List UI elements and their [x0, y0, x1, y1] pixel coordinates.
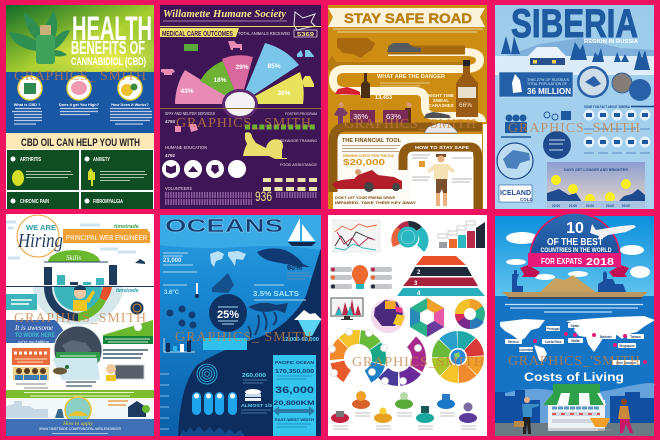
road — [333, 52, 482, 122]
stat: 90% — [287, 263, 311, 279]
diagram: ring — [459, 303, 480, 325]
callout: awesome to work here: TO WORK HERE — [15, 333, 55, 339]
chart: radial outcomes fan: 29% — [235, 64, 249, 71]
stat circle: 25%: 25% — [217, 309, 239, 321]
title: health benefits: CANNABIDIOL (CBD) — [71, 56, 146, 68]
stat: 13,453: 13,453 — [375, 95, 392, 101]
chart: days get longer — [547, 162, 645, 209]
stat: temperature: 3.6°C — [164, 290, 180, 296]
icons: fact circles — [584, 110, 650, 153]
chart: radial outcomes fan: 43% — [180, 88, 194, 95]
icon: small car — [424, 112, 451, 118]
world map with labels: Colombia — [519, 348, 533, 352]
stat: almost 1/3 — [241, 403, 273, 413]
section: humane education: 4792 — [165, 153, 176, 158]
world map with labels: Bahrain — [600, 335, 612, 339]
label: 12,000-60,000 — [282, 337, 319, 343]
callout: awesome to work here — [6, 320, 66, 344]
chart: days get longer: 23:00 — [606, 204, 614, 208]
stat boxes 36% and 63%: 36% — [353, 112, 368, 121]
lower white section with brown road — [333, 124, 487, 209]
world map with labels: Singapore — [619, 344, 635, 348]
intro paragraph — [505, 304, 643, 312]
heading: medical care outcomes: TOTAL ANIMALS RECEIVED — [238, 31, 291, 36]
ribbon: for expats 2018 — [520, 253, 629, 277]
panel: health benefits of CBD — [6, 5, 154, 209]
icon: red convertible — [332, 169, 402, 192]
chart: days get longer: 22:00 — [586, 204, 594, 208]
teal callout — [6, 294, 37, 310]
panel: Pacific Ocean stats: PACIFIC OCEAN — [275, 360, 314, 365]
chart: donut — [391, 221, 429, 252]
icon: large bottle 66%: 66% — [459, 102, 472, 109]
chart: days get longer: 20:00 — [552, 204, 560, 208]
closing message: IMPAIRED. TAKE THEIR KEY AWAY — [335, 200, 416, 205]
section: what is CBD columns — [6, 72, 154, 133]
icon: sailing boat — [288, 218, 316, 246]
footer: how to apply: How to apply — [62, 421, 93, 427]
panel: Pacific Ocean stats: 170,350,000 — [275, 369, 314, 375]
text: financial tool — [342, 138, 401, 167]
heading: fun facts: SOME FUN FACT ABOUT SIBERIA — [584, 105, 630, 109]
text: night time crashes — [428, 93, 454, 108]
people figures — [334, 102, 412, 130]
chart: line chart — [333, 220, 380, 252]
panel: stay safe road — [328, 5, 487, 209]
chart: days get longer: 00:00 — [622, 204, 630, 208]
icon: white car — [424, 123, 458, 133]
world map with labels: Spain — [571, 324, 579, 328]
conditions grid — [6, 149, 154, 209]
chart: concentric rings — [197, 364, 217, 384]
stat box: 36 million: 36 MILLION — [527, 87, 571, 96]
footer: how to apply — [6, 419, 154, 436]
ribbon: for expats 2018: 2018 — [586, 257, 615, 268]
heading: how to stay safe — [410, 145, 473, 207]
heading: CBD oil can help: CBD OIL CAN HELP YOU WITH — [21, 137, 140, 149]
section: spay and neuter: 4793 — [165, 119, 176, 124]
icons: animal silhouettes — [161, 41, 314, 132]
conditions grid: ARTHRITIS — [20, 157, 42, 163]
title ribbon — [328, 8, 485, 27]
banner: timetrade — [114, 224, 139, 230]
icon: oil bottle — [36, 25, 55, 64]
heading: medical care outcomes: 5369 — [297, 32, 314, 38]
stat boxes 36% and 63%: 63% — [386, 112, 401, 121]
heading: how to stay safe: HOW TO STAY SAFE — [415, 145, 469, 150]
section: foster program: FOSTER PROGRAM — [285, 111, 317, 116]
panel: Willamette Humane Society — [160, 5, 321, 209]
title arch: COUNTRIES IN THE WORLD — [540, 248, 612, 254]
text: depth stat: 21,000 — [163, 258, 182, 264]
store illustration — [543, 384, 606, 431]
text: financial tool: DRIVING COSTS FOR THE DUI — [343, 154, 394, 158]
chart: radial outcomes fan: 18% — [213, 77, 227, 84]
stat: almost 1/3: ALMOST 1/3 — [241, 403, 273, 408]
stat: 260,000: 260,000 — [242, 373, 266, 379]
section: humane education — [162, 145, 246, 178]
callout: awesome to work here: we're not kidding — [18, 339, 50, 344]
conditions grid: ANXIETY — [93, 157, 111, 163]
monitor and developer — [66, 350, 148, 386]
icon: pets outline — [294, 12, 315, 30]
callout: awesome to work here: It is awesome — [14, 324, 53, 332]
section: spay and neuter: SPAY AND NEUTER SERVICES — [165, 111, 215, 116]
depth ruler — [160, 374, 169, 429]
figure: woman with cart — [590, 399, 633, 433]
title: REGION IN RUSSIA — [584, 39, 638, 45]
chart: radial outcomes fan — [175, 43, 304, 119]
heading: dangers: WHAT ARE THE DANGER — [377, 74, 445, 80]
iceland badge: COLD — [520, 197, 533, 202]
conditions grid: FIBROMYALGIA — [93, 199, 123, 205]
heading: medical care outcomes: MEDICAL CARE OUTCOMES — [162, 29, 233, 38]
chart: pyramid: 4 — [417, 291, 421, 297]
stat: salts: 3.5% SALTS — [253, 291, 299, 298]
section: foster program — [245, 111, 317, 127]
circle stat — [543, 131, 571, 159]
heading: costs of living: Costs of Living — [524, 370, 624, 384]
icon: whale — [257, 248, 310, 267]
capsule list — [192, 392, 237, 415]
chart: days get longer: 21:00 — [569, 204, 577, 208]
decorative clouds — [6, 222, 136, 258]
diagram: segmented arc — [328, 328, 422, 384]
world map with labels: New Zealand — [616, 361, 636, 365]
watermark: GRAPHICS_SMITH — [352, 355, 484, 370]
panel: Pacific Ocean stats: 36,000 — [275, 385, 314, 395]
title: OCEANS — [165, 216, 283, 236]
seaweed — [248, 312, 276, 338]
clouds — [506, 232, 650, 280]
title ribbon: STAY SAFE ROAD — [344, 10, 472, 26]
footer: how to apply: WWW.TIMETRADE.COM/PRINCIPAL-WEB-ENGINEER — [39, 426, 121, 431]
icons: people and gears — [501, 111, 571, 137]
section: food assistance: FOOD ASSISTANCE — [280, 162, 317, 167]
cyan callout — [203, 338, 247, 350]
icon: wine bottle — [361, 73, 370, 98]
stat box: 36 million — [499, 72, 573, 97]
header: green leaf banner — [6, 5, 154, 72]
label: behavior training: BEHAVIOR TRAINING — [280, 138, 317, 143]
iceland badge — [499, 185, 533, 202]
3D discs row — [331, 391, 477, 429]
closing message — [335, 195, 416, 205]
section: volunteers: 936 — [255, 188, 272, 204]
icon: cabin — [526, 47, 568, 65]
section: volunteers — [165, 186, 317, 204]
seafloor — [180, 426, 245, 436]
title arch: 10 — [566, 220, 584, 237]
chart: pyramid — [397, 256, 485, 297]
title: Willamette Humane Society — [163, 8, 286, 20]
figure: man with basket — [514, 397, 539, 434]
conditions grid: CHRONIC PAIN — [20, 199, 49, 205]
panel: Pacific Ocean stats: EAST-WEST WIDTH — [275, 417, 314, 422]
panel: best countries for expats — [495, 213, 655, 436]
banner — [63, 224, 150, 243]
team photo — [13, 367, 49, 388]
dial with character — [33, 285, 144, 325]
chart: bars — [164, 338, 195, 352]
world map with labels: Mexico — [508, 340, 519, 344]
section: what is CBD columns: Does it get You High? — [59, 102, 100, 107]
icon: barrels — [245, 389, 261, 401]
green band — [6, 390, 154, 398]
island skyline — [502, 270, 648, 299]
text: night time crashes: NIGHT TIME — [428, 93, 454, 98]
icon: fish — [248, 303, 288, 313]
icon: light bulb with options — [330, 265, 392, 289]
world map with labels: Costa Rica — [545, 340, 561, 344]
diagram: purple blob — [371, 299, 405, 333]
iceland badge: ICELAND — [500, 190, 531, 197]
stat: temperature — [163, 283, 199, 298]
pond and duck — [52, 358, 100, 380]
chart: pyramid: 2 — [417, 270, 421, 276]
heading: CBD oil can help — [6, 133, 154, 149]
chart: pyramid: 3 — [414, 281, 418, 287]
banner: PRINCIPAL WEB ENGINEER — [66, 235, 147, 242]
watermark: GRAPHICS_ SMITH — [14, 69, 146, 84]
watermark: GRAPHICS_ SMITH — [176, 116, 311, 131]
globe — [54, 326, 102, 374]
icon: iceberg — [294, 310, 322, 336]
world map with labels — [500, 316, 655, 365]
section: what is CBD columns: What is CBD ? — [14, 102, 41, 107]
text: financial tool: $20,000 — [343, 158, 386, 167]
diagram: hexagon — [410, 298, 444, 337]
panel: Pacific Ocean stats — [273, 355, 316, 436]
chart: radial outcomes fan: 36% — [277, 90, 291, 97]
world map — [210, 251, 246, 267]
city backdrop — [495, 383, 655, 436]
title arch: OF THE BEST — [547, 237, 603, 248]
ribbon: for expats 2018: FOR EXPATS — [541, 257, 583, 266]
dial with character: timetrade — [116, 288, 139, 294]
map circle — [497, 143, 533, 179]
text: financial tool: THE FINANCIAL TOOL — [342, 138, 401, 144]
logo: we are hiring — [17, 215, 63, 257]
deep water shape — [178, 248, 321, 436]
chart: stepped bars — [438, 221, 485, 248]
heading: medical care outcomes — [160, 28, 317, 38]
icon: red car — [335, 87, 360, 95]
illustration: woman and dog — [243, 132, 287, 159]
world map with labels: Malta — [571, 339, 580, 343]
panel: Siberia — [495, 2, 654, 209]
stat boxes 36% and 63% — [350, 110, 408, 124]
title: health benefits: BENEFITS OF — [71, 38, 145, 58]
world map with labels: Taiwan — [630, 335, 641, 339]
logo: we are hiring: Hiring — [17, 230, 63, 252]
section: food assistance — [263, 162, 317, 189]
winter landscape — [495, 36, 654, 75]
stat circle: 25% — [209, 294, 247, 332]
stat: salts — [253, 285, 306, 300]
stat: 90%: 90% — [287, 263, 302, 272]
stat box: 36 million: THIS 27% OF RUSSIA'S — [527, 78, 570, 82]
callout: green perks — [103, 320, 153, 344]
stat box: 36 million: TOTAL POPULATION OF — [527, 82, 567, 86]
text: night time crashes: CARASHES — [428, 103, 454, 108]
icon: large bottle 66% — [456, 60, 478, 117]
badges — [577, 66, 651, 101]
icon: grey car — [387, 43, 421, 52]
calendar card — [12, 348, 50, 365]
skills heading and chart — [44, 250, 145, 285]
watermark: GRAPHICS_ SMITH — [175, 330, 312, 345]
diagram: globe wheel — [440, 340, 476, 374]
panel: oceans — [160, 215, 322, 436]
text: night time crashes: SWEAL — [433, 98, 449, 103]
world map with labels: Portugal — [547, 327, 560, 331]
icon: megaphone ship — [212, 273, 234, 293]
chart: radial outcomes fan: 85% — [267, 63, 281, 70]
section: spay and neuter — [165, 111, 215, 124]
title: health benefits — [71, 10, 152, 68]
section: what is CBD columns: How Does it Works? — [111, 102, 149, 107]
panel: Pacific Ocean stats: 20,800KM — [274, 401, 314, 407]
watermark: GRAPHICS_ SMITH — [344, 117, 476, 132]
watermark: GRAPHICS_SMITH — [14, 311, 146, 326]
section: humane education: HUMANE EDUCATION — [165, 145, 207, 150]
section: volunteers: VOLUNTEERS — [165, 186, 192, 191]
title arch — [530, 213, 620, 258]
icon: monitor chart — [331, 298, 363, 320]
logo: we are hiring: WE ARE — [26, 225, 56, 232]
closing message: DON'T LET YOUR FRIEND DRIVE — [335, 195, 395, 200]
icon: airplane — [590, 224, 636, 239]
watermark: GRAPHICS_'SMITH — [508, 354, 640, 369]
illustration: man in lederhosen — [419, 154, 455, 206]
panel: infographic elements — [328, 215, 487, 436]
text: depth stat — [163, 253, 197, 272]
footer scene — [6, 397, 154, 423]
hex diagram — [166, 306, 196, 328]
panel: we are hiring — [6, 214, 154, 436]
skills heading and chart: Skills — [66, 254, 81, 262]
map: usa — [337, 38, 375, 58]
watermark: GRAPHICS_SMITH — [508, 121, 640, 136]
chart: days get longer: DAYS GET LONGER AND BRIGHTER — [564, 168, 628, 172]
stat: 260,000 — [242, 373, 267, 383]
title: health benefits: HEALTH — [72, 10, 152, 48]
